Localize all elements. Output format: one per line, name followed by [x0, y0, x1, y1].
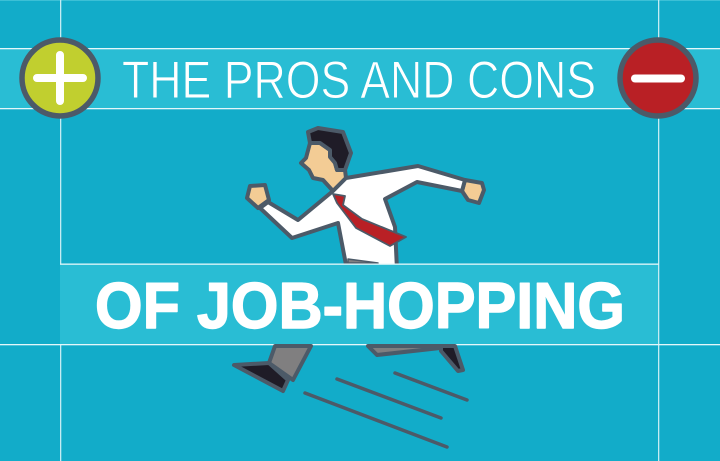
title band: [0, 48, 720, 109]
white shirt: [260, 166, 465, 270]
leading leg: [368, 346, 440, 355]
icon: plus badge: [22, 40, 98, 116]
hair: [308, 128, 351, 170]
red tie: [333, 194, 406, 246]
left fist: [247, 185, 269, 208]
speed lines: [305, 373, 467, 447]
illustration: running businessman: [247, 128, 484, 270]
legs and shoes below banner: [234, 346, 463, 391]
secondary banner: [0, 264, 720, 345]
neck and face: [301, 143, 346, 191]
icon: minus badge: [620, 40, 696, 116]
right fist: [462, 180, 484, 203]
banner text: OF JOB-HOPPING: [95, 269, 625, 342]
trailing shoe: [234, 363, 288, 391]
leading shoe: [441, 346, 463, 371]
title text: THE PROS AND CONS: [122, 51, 596, 110]
belt line: [348, 259, 378, 263]
trailing leg: [269, 346, 311, 380]
